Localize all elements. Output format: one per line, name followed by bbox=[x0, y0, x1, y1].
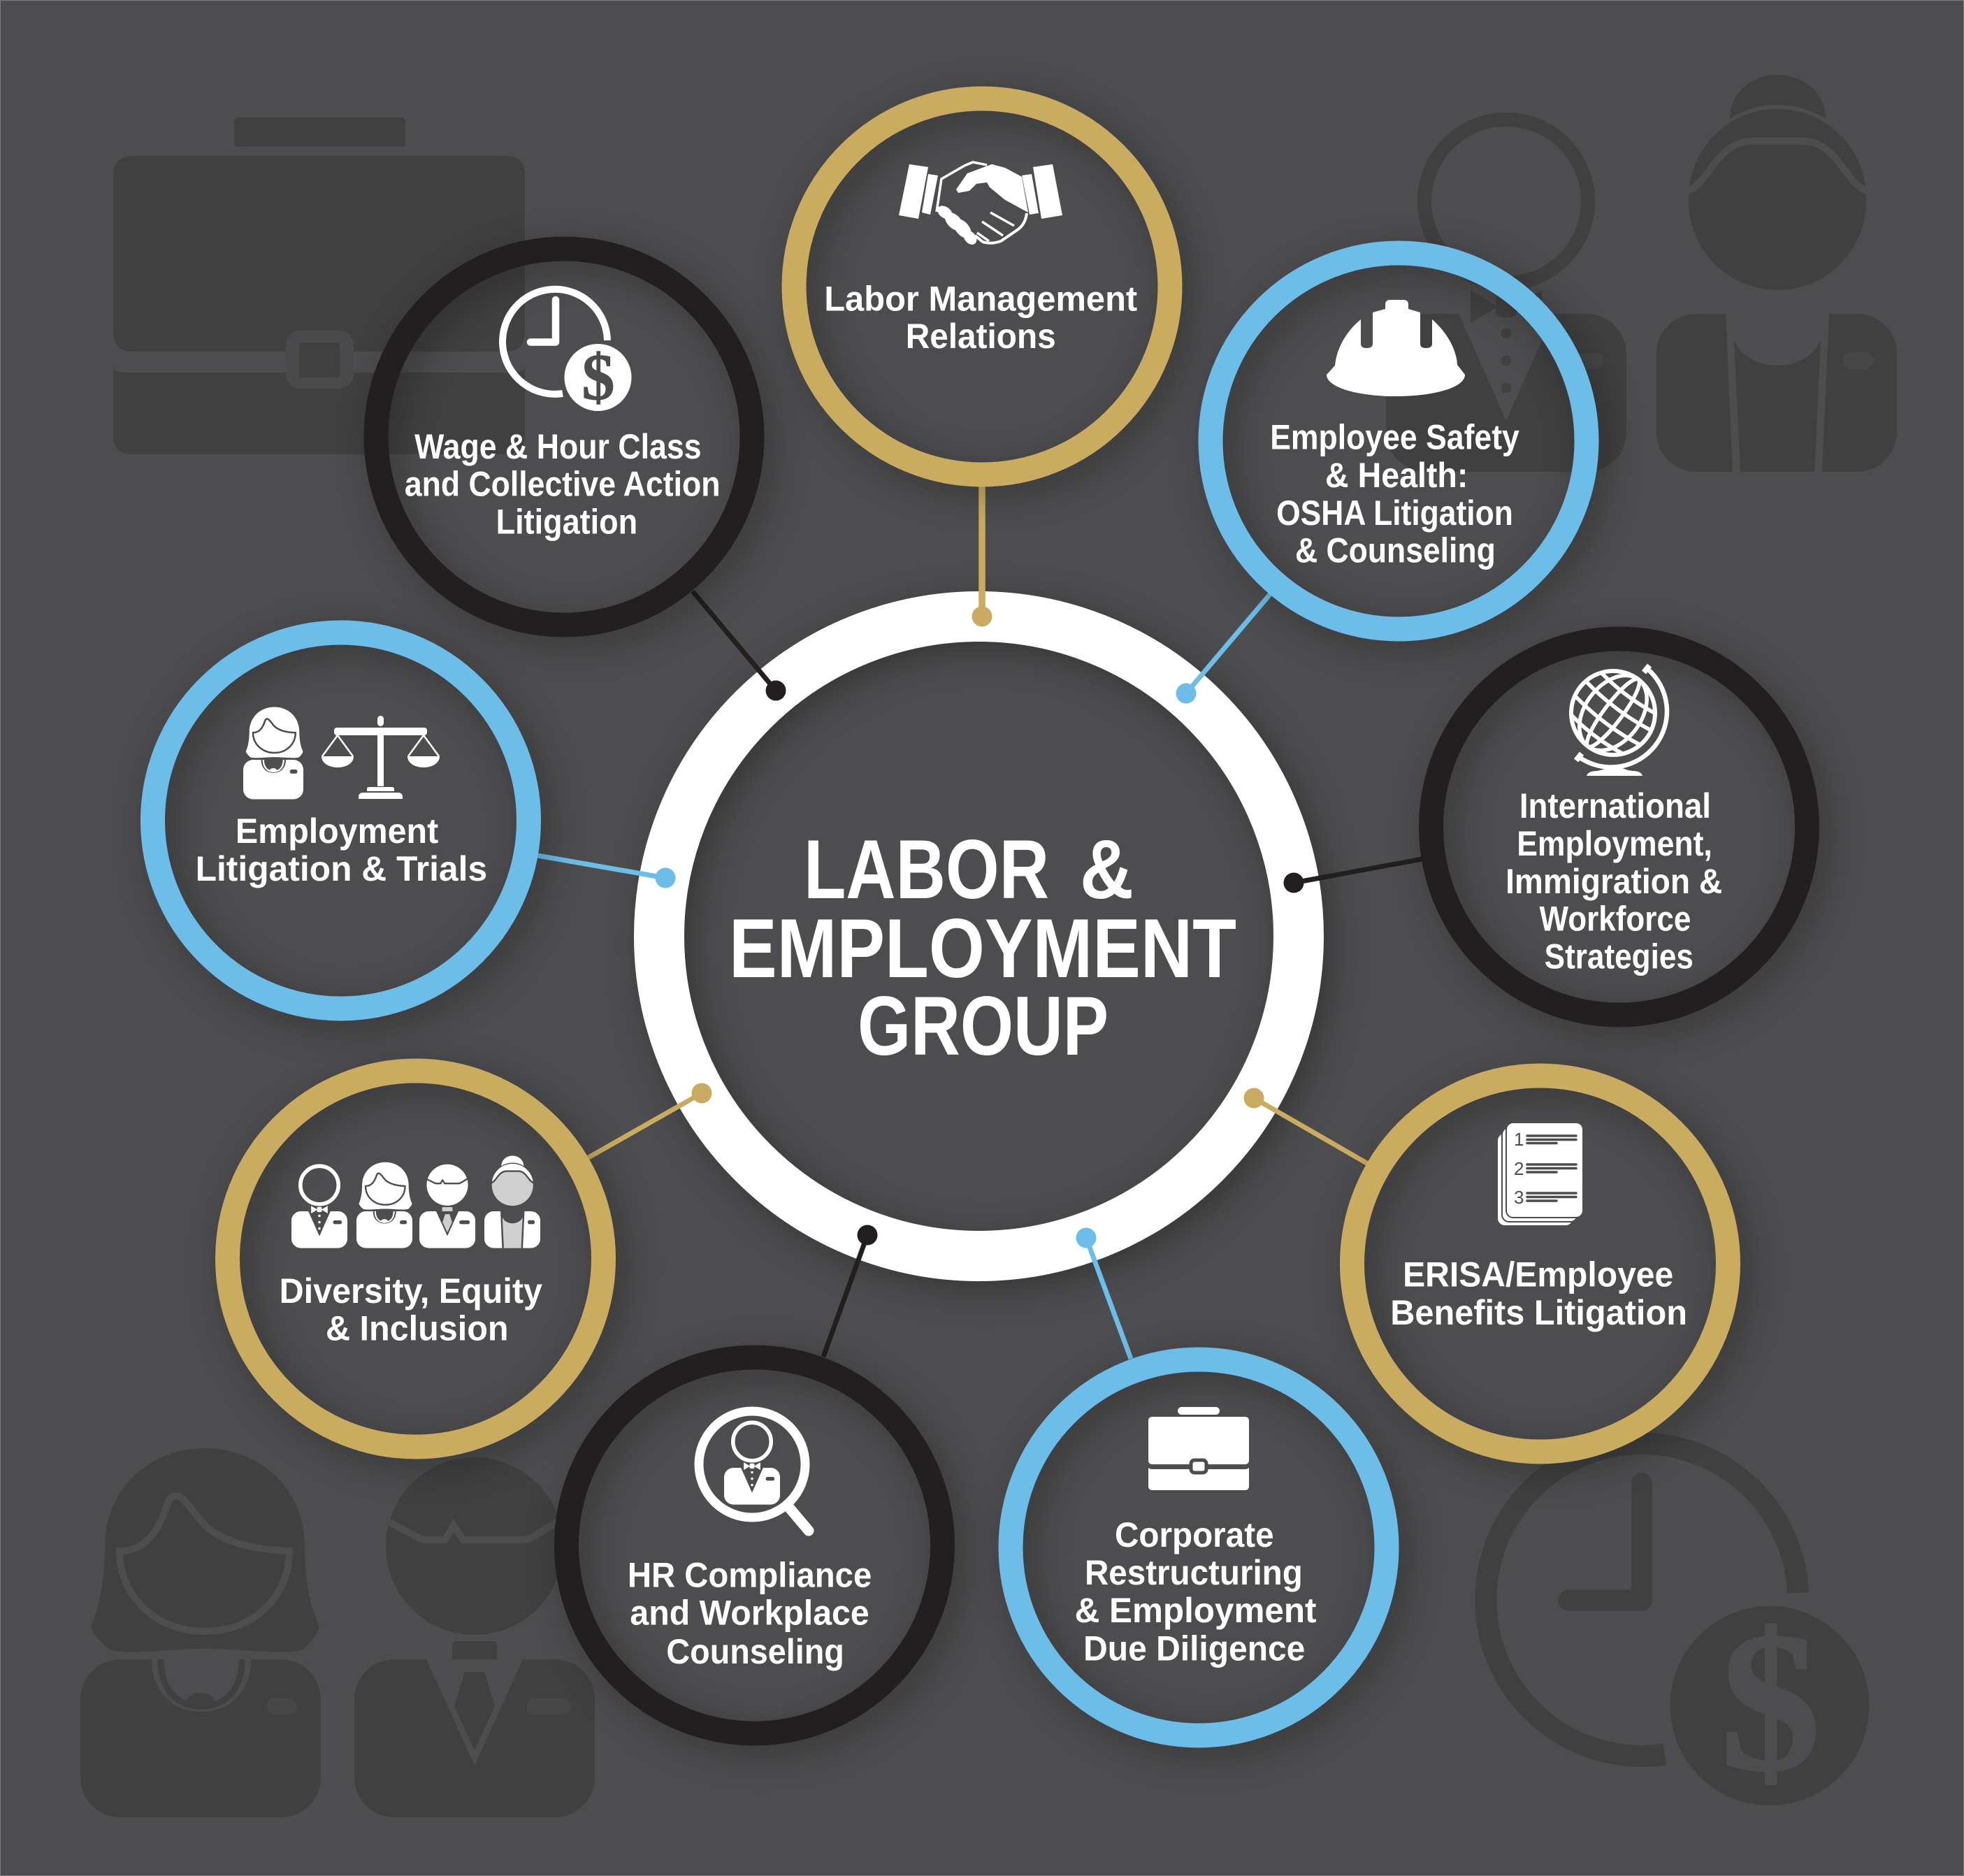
background icon: man with bow tie bbox=[1386, 120, 1626, 472]
label: employee safety bbox=[1270, 417, 1519, 570]
panel: erisa bbox=[1352, 1076, 1728, 1452]
background icon: clock and dollar bbox=[1486, 1443, 1869, 1812]
center title: EMPLOYMENT bbox=[729, 902, 1236, 995]
center title: LABOR bbox=[804, 823, 1049, 916]
label: international: Immigration & bbox=[1506, 862, 1722, 901]
center title: & bbox=[1080, 823, 1134, 916]
label: corporate restructuring: & Employment bbox=[1075, 1591, 1317, 1630]
connector: labor management bbox=[972, 482, 992, 626]
icon: globe bbox=[1554, 654, 1672, 776]
label: wage and hour: Wage & Hour Class bbox=[414, 427, 702, 466]
panel: hr compliance bbox=[566, 1357, 942, 1733]
label: wage and hour bbox=[405, 427, 720, 541]
center ring bbox=[659, 616, 1299, 1256]
panel: wage and hour bbox=[376, 249, 752, 625]
background icon: man with tie bbox=[354, 1457, 595, 1817]
label: employment litigation: Litigation & Trials bbox=[196, 849, 487, 888]
icon: handshake bbox=[899, 162, 1062, 247]
icon: hard hat bbox=[1327, 300, 1465, 396]
panel: international bbox=[1431, 639, 1807, 1015]
label: corporate restructuring bbox=[1075, 1515, 1317, 1668]
panel: labor management relations bbox=[794, 99, 1170, 475]
connector: erisa bbox=[1244, 1088, 1368, 1164]
icon: briefcase bbox=[1148, 1407, 1249, 1490]
label: hr compliance: and Workplace bbox=[630, 1593, 869, 1632]
ring: diversity bbox=[228, 1071, 604, 1447]
label: employee safety: OSHA Litigation bbox=[1276, 493, 1513, 533]
connector: employment litigation bbox=[537, 856, 675, 888]
connector: diversity bbox=[589, 1083, 712, 1157]
ring: hr compliance bbox=[566, 1357, 942, 1733]
connector: corporate bbox=[1076, 1227, 1131, 1359]
center title bbox=[729, 823, 1236, 1073]
label: diversity bbox=[280, 1271, 542, 1348]
ring: international bbox=[1431, 639, 1807, 1015]
icon: woman and scales bbox=[243, 707, 440, 800]
connector: employee safety bbox=[1176, 593, 1271, 703]
label: diversity: & Inclusion bbox=[326, 1309, 509, 1348]
panel: diversity bbox=[228, 1071, 604, 1447]
label: international: Workforce bbox=[1539, 900, 1691, 939]
icon: numbered document: 2 bbox=[1514, 1158, 1524, 1179]
label: wage and hour: Litigation bbox=[496, 502, 637, 541]
ring: labor management bbox=[794, 99, 1170, 475]
ring: erisa bbox=[1352, 1076, 1728, 1452]
label: erisa bbox=[1390, 1255, 1687, 1332]
label: employee safety: & Counseling bbox=[1295, 531, 1496, 570]
label: erisa: Benefits Litigation bbox=[1390, 1293, 1687, 1332]
panel: employee safety bbox=[1211, 253, 1587, 629]
label: corporate restructuring: Corporate bbox=[1115, 1515, 1274, 1554]
label: labor management: Relations bbox=[906, 317, 1056, 356]
connector: international bbox=[1283, 858, 1426, 893]
ring: corporate restructuring bbox=[1011, 1359, 1387, 1736]
label: international bbox=[1506, 786, 1722, 976]
label: hr compliance: Counseling bbox=[666, 1632, 844, 1671]
background icon: woman bbox=[80, 1448, 321, 1817]
icon: clock with dollar: $ bbox=[582, 341, 615, 414]
background icon: briefcase bbox=[113, 117, 525, 454]
label: hr compliance: HR Compliance bbox=[628, 1556, 872, 1595]
ring: wage and hour bbox=[376, 249, 752, 625]
label: international: Employment, bbox=[1517, 824, 1712, 863]
label: labor management bbox=[824, 279, 1138, 356]
center title: GROUP bbox=[858, 979, 1109, 1073]
connector: hr bbox=[823, 1225, 878, 1357]
background icon: woman with bun bbox=[1656, 75, 1897, 472]
background icon: clock and dollar: $ bbox=[1721, 1591, 1820, 1812]
icon: numbered document: 1 bbox=[1514, 1129, 1524, 1150]
label: erisa: ERISA/Employee bbox=[1403, 1255, 1673, 1294]
icon: four people bbox=[291, 1155, 540, 1248]
icon: clock with dollar bbox=[503, 289, 632, 414]
label: diversity: Diversity, Equity bbox=[280, 1271, 542, 1311]
icon: magnifier with person bbox=[699, 1411, 809, 1531]
label: employee safety: & Health: bbox=[1325, 456, 1468, 495]
connector: wage and hour bbox=[693, 591, 786, 700]
label: international: International bbox=[1519, 786, 1711, 825]
label: labor management: Labor Management bbox=[824, 279, 1138, 318]
label: corporate restructuring: Restructuring bbox=[1085, 1553, 1303, 1592]
label: wage and hour: and Collective Action bbox=[405, 465, 720, 504]
label: corporate restructuring: Due Diligence bbox=[1083, 1629, 1305, 1668]
label: employment litigation: Employment bbox=[236, 811, 439, 851]
icon: numbered document bbox=[1498, 1123, 1583, 1225]
label: international: Strategies bbox=[1545, 937, 1694, 976]
ring: employee safety bbox=[1211, 253, 1587, 629]
icon: numbered document: 3 bbox=[1514, 1187, 1524, 1208]
label: hr compliance bbox=[628, 1556, 872, 1671]
panel: employment litigation bbox=[152, 633, 528, 1009]
label: employee safety: Employee Safety bbox=[1270, 417, 1519, 456]
panel: corporate restructuring bbox=[1011, 1359, 1387, 1736]
label: employment litigation bbox=[196, 811, 487, 888]
ring: employment litigation bbox=[152, 633, 528, 1009]
